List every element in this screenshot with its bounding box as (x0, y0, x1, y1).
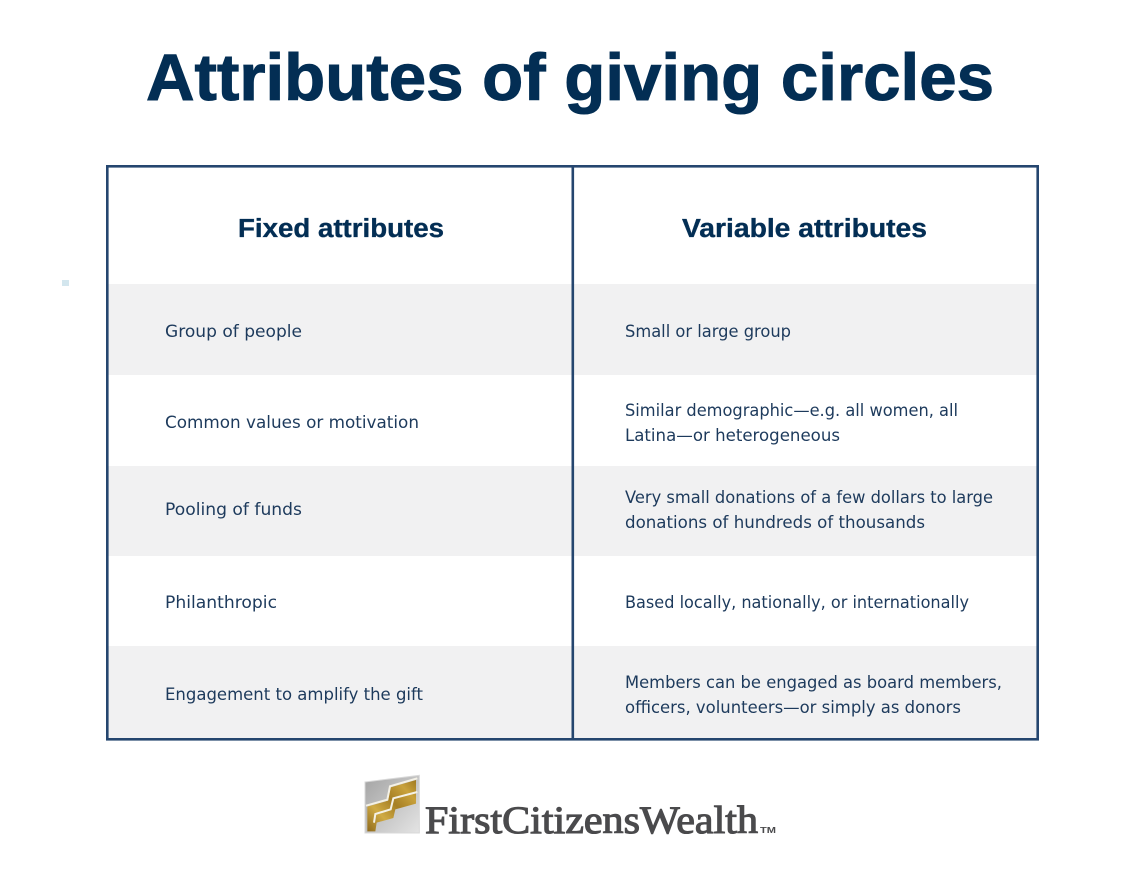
row 2 (165, 401, 958, 446)
row 5: Engagement to amplify the gift (165, 685, 423, 705)
row 1: Group of people (165, 322, 302, 342)
logo (365, 775, 776, 842)
decorative marker (62, 280, 69, 286)
row 4: Philanthropic (165, 593, 277, 613)
row 3 (165, 488, 993, 533)
row 1: Small or large group (625, 322, 791, 342)
row 2: Common values or motivation (165, 413, 419, 433)
row 5 (165, 673, 1002, 718)
row 5: Members can be engaged as board members, (625, 673, 1002, 693)
row backgrounds (107, 284, 1038, 739)
row 2: Similar demographic—e.g. all women, all (625, 401, 958, 421)
row 4: Based locally, nationally, or internationally (625, 593, 969, 613)
row 5: officers, volunteers—or simply as donors (625, 698, 961, 718)
row 2: Latina—or heterogeneous (625, 426, 840, 446)
table frame (107, 166, 1038, 739)
table (107, 166, 1038, 739)
row 4 (165, 593, 969, 613)
row 3: Pooling of funds (165, 500, 302, 520)
wordmark: FirstCitizensWealth (425, 799, 758, 842)
row 1 (165, 322, 791, 342)
heading: fixed attributes: Fixed attributes (238, 215, 444, 243)
title: Attributes of giving circles (146, 40, 994, 114)
trademark: TM (760, 825, 776, 835)
icon: logo mark (365, 775, 419, 833)
row 3: Very small donations of a few dollars to large (625, 488, 993, 508)
heading: variable attributes: Variable attributes (682, 215, 927, 243)
row 3: donations of hundreds of thousands (625, 513, 925, 533)
